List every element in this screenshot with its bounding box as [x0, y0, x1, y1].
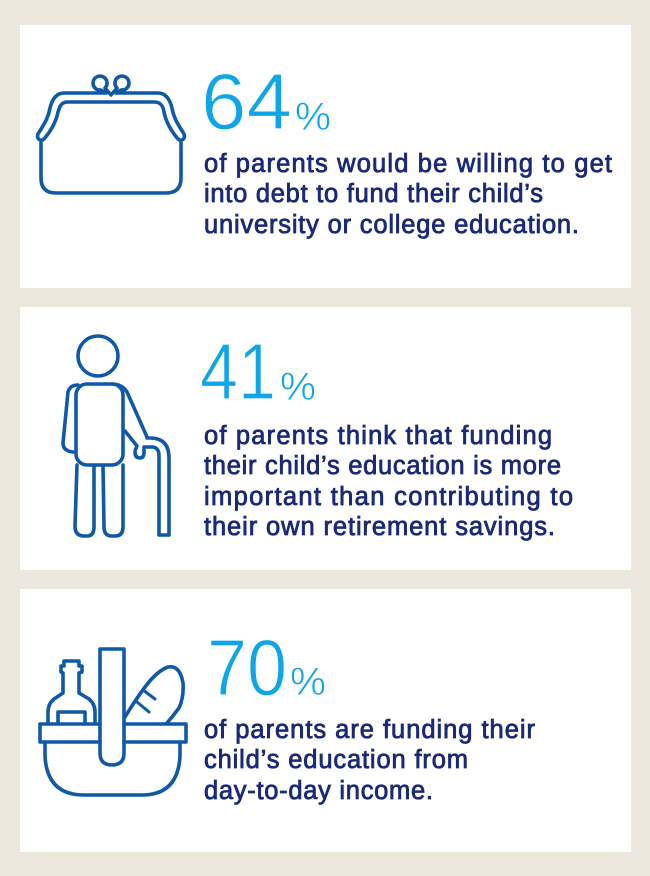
text block: income: of parents are funding their [204, 716, 536, 744]
panel: 64 percent debt [20, 25, 631, 288]
panel: 41 percent retirement [20, 307, 631, 570]
stat: 64%: % [295, 96, 331, 139]
text block: income: day-to-day income. [204, 777, 433, 805]
icon: picnic basket [40, 649, 186, 795]
text block: income [204, 716, 536, 805]
stat: 70%: 70 [207, 623, 287, 712]
stat: 41%: % [280, 366, 316, 409]
text block: debt [204, 150, 612, 239]
panel: 70 percent income [20, 589, 631, 852]
text block: retirement: important than contributing to [204, 483, 573, 511]
stat: 64%: 64 [201, 57, 292, 146]
text block: debt: university or college education. [204, 211, 579, 239]
text block: debt: into debt to fund their child’s [204, 180, 543, 208]
text block: retirement: of parents think that funding [204, 422, 552, 450]
icon: purse [38, 76, 184, 193]
text block: income: child’s education from [204, 746, 468, 774]
text block: retirement [204, 422, 573, 541]
text block: debt: of parents would be willing to get [204, 150, 612, 178]
text block: retirement: their child’s education is more [204, 452, 561, 480]
stat: 70%: % [290, 661, 326, 704]
icon: person with cane [63, 336, 169, 536]
stat: 64% [201, 57, 331, 146]
text block: retirement: their own retirement savings. [204, 513, 555, 541]
stat: 41%: 41 [200, 327, 276, 416]
